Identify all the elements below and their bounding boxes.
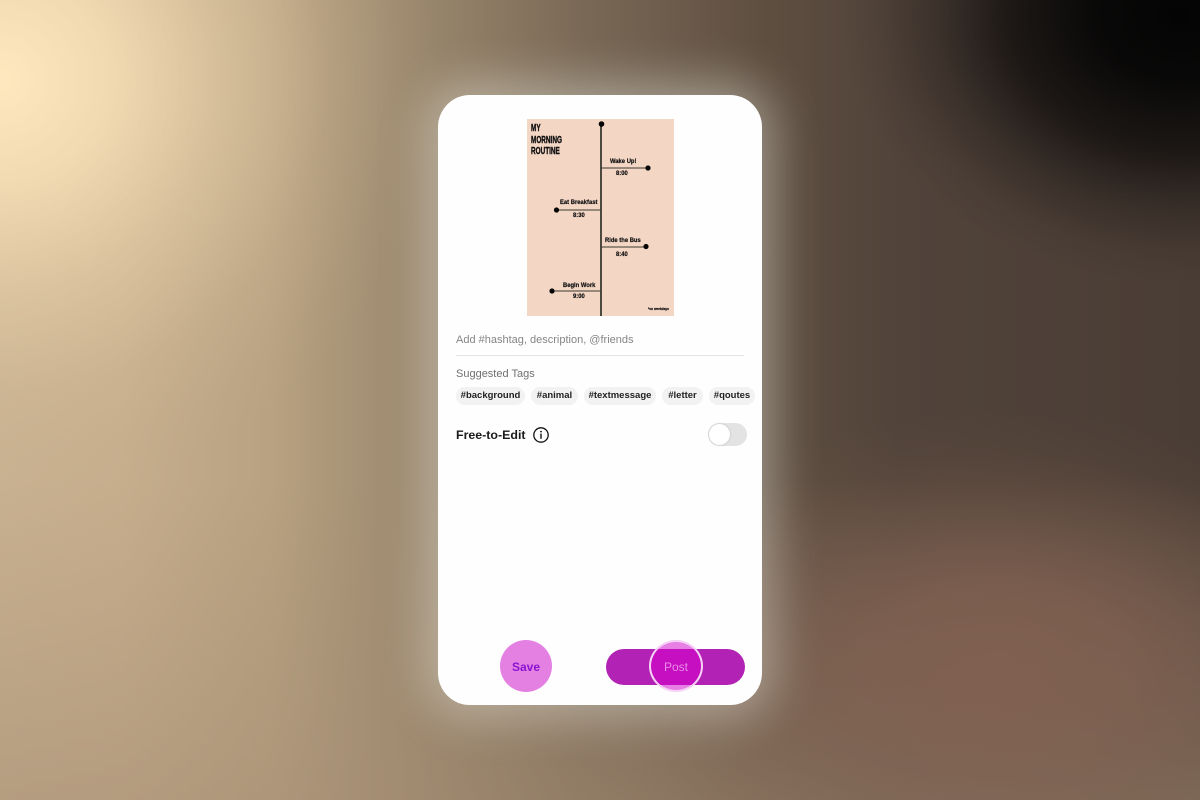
tag: background: #background (461, 390, 520, 401)
tag: textmessage (584, 387, 656, 405)
tag: textmessage: #textmessage (589, 390, 651, 401)
free-to-edit label: Free-to-Edit (456, 428, 526, 442)
toggle switch (708, 423, 747, 446)
tag: qoutes: #qoutes (714, 390, 750, 401)
step: eat breakfast: Eat Breakfast (560, 199, 597, 206)
suggested tags heading: Suggested Tags (456, 368, 535, 380)
post highlight circle: Post (664, 660, 688, 674)
poster: my morning routine: 9:00 (573, 293, 585, 300)
post highlight circle (649, 640, 703, 692)
poster title (531, 123, 562, 157)
poster: my morning routine: 8:00 (616, 170, 628, 177)
tag: letter: #letter (668, 390, 697, 401)
tag: animal (531, 387, 578, 405)
save button (500, 640, 552, 692)
divider (456, 355, 744, 356)
poster title: MORNING (531, 134, 562, 146)
phone card (438, 95, 762, 705)
timeline chart (549, 121, 651, 316)
post button (606, 649, 745, 685)
poster: my morning routine (527, 119, 674, 316)
tag: letter (662, 387, 703, 405)
step: begin work: Begin Work (563, 282, 595, 289)
tag: animal: #animal (537, 390, 572, 401)
description placeholder: Add #hashtag, description, @friends (456, 334, 634, 346)
icon: info (533, 427, 549, 443)
poster title: MY (531, 123, 541, 134)
toggle knob (709, 424, 730, 445)
poster: my morning routine: 8:40 (616, 251, 628, 258)
tag: qoutes (709, 387, 755, 405)
poster: my morning routine: 8:30 (573, 212, 585, 219)
step: ride the bus: Ride the Bus (605, 237, 641, 244)
poster title: ROUTINE (531, 146, 560, 157)
tag: background (456, 387, 525, 405)
save button: Save (512, 660, 540, 674)
step: wake up: Wake Up! (610, 158, 636, 165)
footnote: *on weekdays (648, 307, 669, 311)
